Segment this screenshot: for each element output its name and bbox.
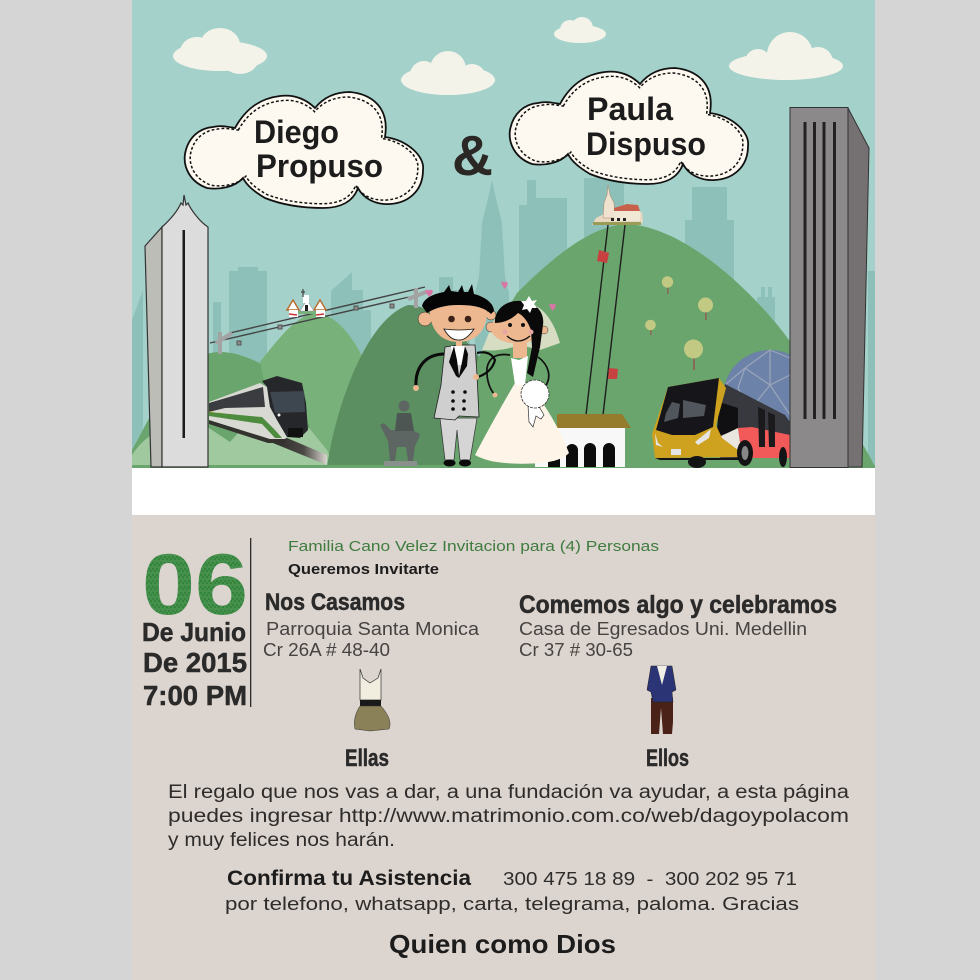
bride dress — [475, 383, 569, 464]
bus side window — [717, 402, 738, 436]
details background — [132, 515, 875, 980]
ground line — [132, 465, 875, 468]
bus headlights — [655, 429, 711, 447]
planetarium dome — [723, 350, 817, 444]
reception venue: Casa de Egresados Uni. Medellin — [519, 619, 807, 639]
groom jacket — [434, 345, 479, 420]
city skyline silhouette — [132, 178, 875, 467]
church on big hill — [592, 185, 643, 225]
bride bouquet — [521, 380, 549, 427]
name cloud: Paula Dispuso — [510, 68, 748, 184]
gift message: puedes ingresar http://www.matrimonio.com.co/web/dagoypolacom — [168, 806, 849, 827]
name text Propuso: Propuso — [256, 148, 383, 184]
bus windshield reflections — [664, 400, 706, 422]
groom neck — [456, 339, 462, 346]
groom — [413, 284, 496, 466]
cable car left — [210, 287, 426, 354]
groom buttons — [451, 390, 467, 411]
bus yellow front — [652, 378, 738, 458]
groom eyes — [448, 316, 471, 322]
groom left arm — [416, 354, 445, 386]
panel: invitation details — [132, 515, 875, 980]
bride hand — [492, 392, 498, 398]
ampersand: & — [452, 124, 493, 188]
bride ears — [486, 322, 548, 334]
bus body — [716, 384, 790, 458]
groom head — [430, 305, 487, 342]
groom right arm — [477, 352, 495, 377]
white clouds — [173, 17, 843, 95]
bride hair — [495, 301, 543, 377]
hillside cable lines and red cars — [586, 225, 625, 415]
bus wheels and skirt — [655, 440, 787, 468]
dress caption: Ellas — [345, 745, 389, 772]
divider — [250, 538, 251, 707]
groom shoes — [444, 460, 471, 466]
bus doors — [758, 407, 775, 447]
suit caption: Ellos — [646, 745, 689, 772]
groom shirt and tie — [449, 346, 468, 378]
day number: 06 — [142, 537, 248, 633]
white band — [132, 468, 875, 515]
metro train — [209, 376, 308, 443]
icon: dress — [354, 669, 390, 731]
ceremony heading: Nos Casamos — [265, 589, 405, 616]
RSVP note: por telefono, whatsapp, carta, telegrama, paloma. Gracias — [225, 893, 799, 914]
gift message: y muy felices nos harán. — [168, 830, 395, 851]
trees — [645, 276, 713, 370]
phone numbers: 300 475 18 89 - 300 202 95 71 — [503, 868, 797, 889]
statue on horse — [380, 400, 420, 466]
hearts — [425, 282, 556, 311]
left tower building — [145, 195, 208, 467]
big green hill — [442, 224, 875, 467]
ceremony venue: Parroquia Santa Monica — [266, 619, 480, 639]
bride far arm — [538, 357, 549, 387]
groom ears — [418, 310, 496, 326]
RSVP heading: Confirma tu Asistencia — [227, 867, 471, 890]
bride veil — [482, 302, 560, 350]
bride face — [491, 312, 543, 344]
name text Diego: Diego — [254, 114, 339, 150]
groom smile — [444, 329, 474, 340]
metroplus bus — [652, 378, 790, 468]
middle left hill — [260, 313, 400, 467]
pale foreground hill — [132, 425, 335, 467]
right tower building — [790, 108, 869, 468]
ceremony address: Cr 26A # 48-40 — [263, 640, 390, 660]
sky background — [132, 0, 875, 468]
reception address: Cr 37 # 30-65 — [519, 640, 633, 660]
bride — [475, 296, 569, 464]
bride near arm — [487, 355, 510, 395]
bride bodice — [511, 356, 528, 385]
guest line: Familia Cano Velez Invitacion para (4) Personas — [288, 538, 659, 555]
gift message: El regalo que nos vas a dar, a una fundación va ayudar, a esta página — [168, 782, 849, 803]
train track — [268, 438, 327, 465]
white chapel — [535, 414, 631, 467]
bus white panel — [717, 428, 742, 457]
gift message — [168, 782, 849, 851]
closing line: Quien como Dios — [389, 929, 616, 959]
icon: suit — [647, 666, 676, 734]
name text Paula: Paula — [587, 91, 673, 127]
bus red panel — [738, 427, 790, 458]
bride smile — [507, 336, 530, 341]
year: De 2015 — [143, 647, 247, 678]
name text Dispuso: Dispuso — [586, 126, 706, 162]
date block — [142, 537, 248, 711]
invite line: Queremos Invitarte — [288, 562, 439, 578]
bride neck — [513, 342, 527, 358]
panel: illustrated sky scene — [132, 0, 875, 468]
bride flower — [521, 296, 537, 313]
dark central hill — [327, 305, 480, 467]
name cloud: Diego Propuso — [185, 92, 423, 208]
groom pants — [440, 418, 477, 460]
groom hands — [413, 374, 479, 391]
small left hill — [132, 352, 345, 467]
groom hair — [422, 284, 494, 314]
bride eyes — [508, 323, 525, 327]
bus plate — [671, 449, 681, 455]
time: 7:00 PM — [143, 680, 247, 711]
bride cheeks — [502, 330, 534, 334]
month: De Junio — [142, 617, 246, 647]
reception heading: Comemos algo y celebramos — [519, 591, 837, 619]
bus windshield — [656, 378, 719, 435]
village church on left hill — [287, 289, 326, 317]
